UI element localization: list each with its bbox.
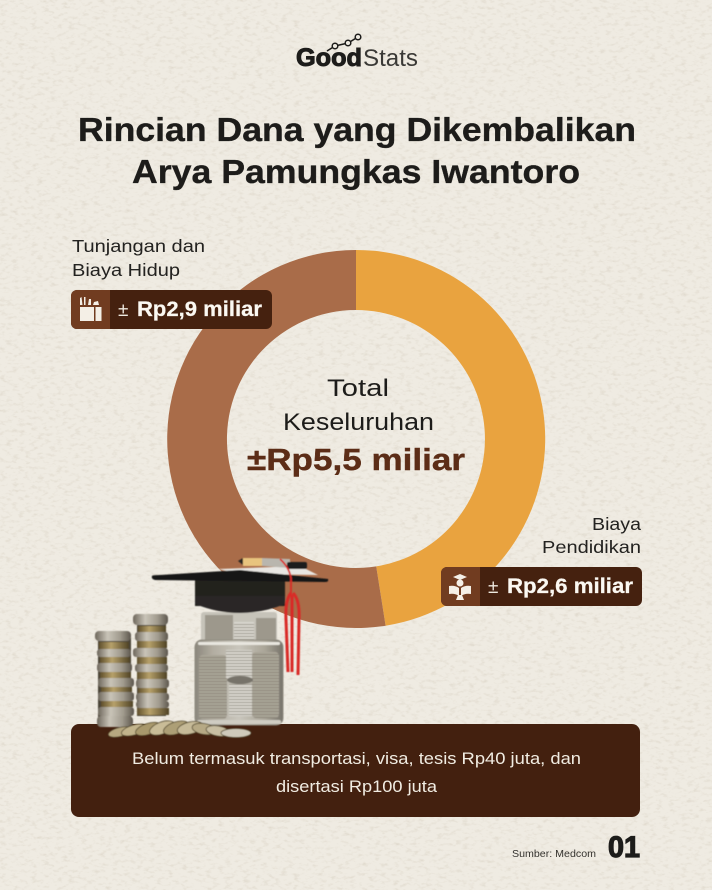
note panel: Belum termasuk transportasi, visa, tesis Rp40 juta, dan <box>132 750 581 768</box>
left coin stack <box>95 631 134 727</box>
note panel: disertasi Rp100 juta <box>276 778 438 796</box>
segment: Biaya Pendidikan <box>356 250 545 626</box>
value pill: Rp2,6 miliar: Rp2,6 miliar <box>507 575 633 598</box>
illustration: coin stacks, jar and graduation cap <box>95 558 328 739</box>
graduation cap <box>152 570 328 613</box>
red tassel <box>280 559 299 675</box>
label: Tunjangan dan Biaya Hidup: Biaya Hidup <box>72 260 180 280</box>
label: Biaya Pendidikan: Biaya <box>592 514 641 534</box>
title: Rincian Dana yang Dikembalikan <box>78 111 636 148</box>
title: Arya Pamungkas Iwantoro <box>132 153 580 190</box>
note panel <box>71 724 640 817</box>
label: Biaya Pendidikan: Pendidikan <box>542 537 641 557</box>
label: Tunjangan dan Biaya Hidup: Tunjangan dan <box>72 236 205 256</box>
segment: Tunjangan dan Biaya Hidup <box>167 250 386 628</box>
label: Biaya Pendidikan <box>542 514 641 557</box>
right coin stack <box>133 614 169 716</box>
donut centre total: ±Rp5,5 miliar <box>247 442 465 477</box>
logo: GoodStats <box>296 34 418 72</box>
value pill: Rp2,9 miliar: ± <box>118 300 128 321</box>
value pill: Rp2,6 miliar <box>441 567 642 606</box>
papers and pencil on cap <box>218 558 318 575</box>
value pill: Rp2,9 miliar: Rp2,9 miliar <box>137 298 262 321</box>
donut chart <box>167 250 545 628</box>
donut centre total <box>247 375 465 477</box>
title <box>78 111 636 190</box>
glass jar with coins <box>195 612 283 725</box>
donut centre total: Keseluruhan <box>283 409 434 436</box>
page number: 01 <box>608 831 640 864</box>
icon: grocery bag <box>80 297 102 321</box>
donut centre total: Total <box>327 375 389 402</box>
label: Tunjangan dan Biaya Hidup <box>72 236 205 280</box>
value pill: Rp2,9 miliar <box>71 290 272 329</box>
icon: graduate with book <box>449 574 471 600</box>
logo: GoodStats: Stats <box>363 45 418 72</box>
source: Sumber: Medcom <box>512 848 596 860</box>
loose coins <box>107 718 251 739</box>
logo: GoodStats: Good <box>296 44 362 72</box>
value pill: Rp2,6 miliar: ± <box>488 577 498 598</box>
